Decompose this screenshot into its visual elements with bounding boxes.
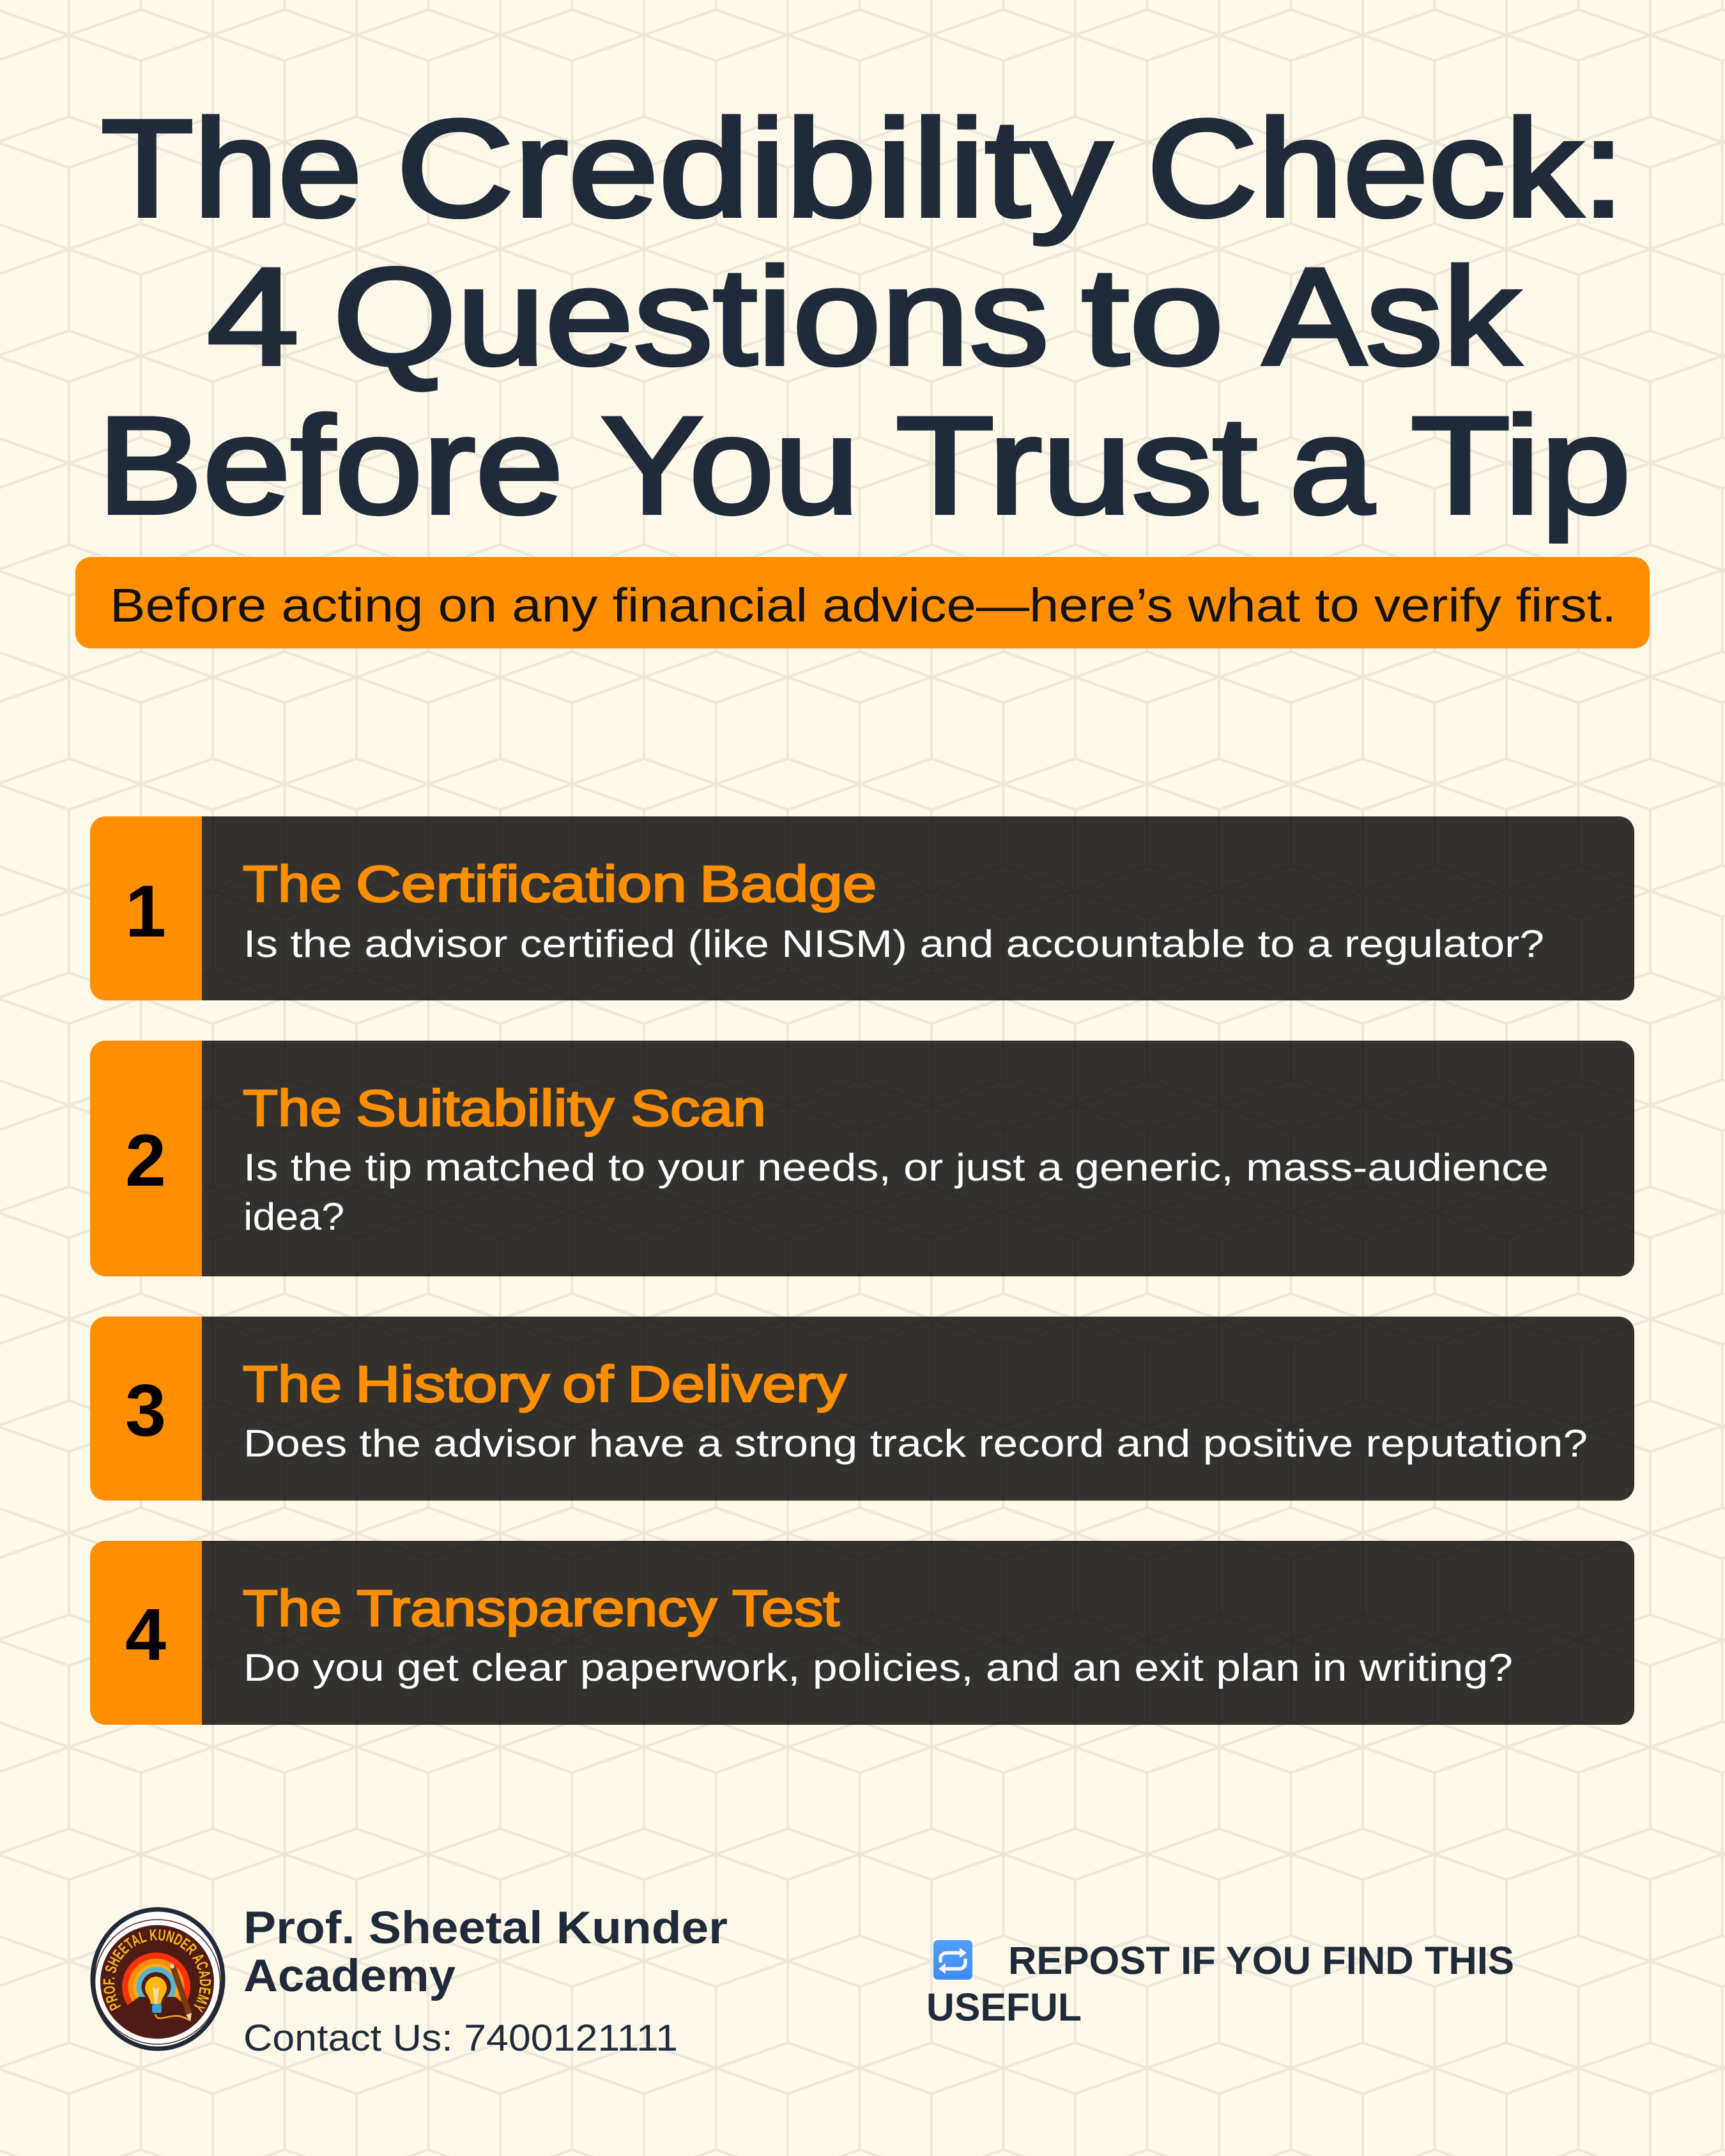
title: Questions	[333, 239, 1049, 394]
repost call to action: REPOST IF YOU FIND THIS	[1008, 1939, 1514, 1982]
title: Tip	[1411, 388, 1631, 542]
panel: question 4: The	[243, 1580, 342, 1637]
panel: question 3	[90, 1317, 1634, 1501]
repost call to action	[926, 1939, 1514, 2029]
panel: question 2: The	[243, 1080, 342, 1136]
icon: academy logo	[91, 1908, 225, 2051]
title: You	[601, 388, 859, 542]
panel: question 1: Certification	[356, 855, 687, 912]
panel: question 1: The	[243, 855, 342, 912]
title: Trust	[896, 388, 1257, 542]
title: Credibility	[396, 91, 1112, 245]
panel: question 1: 1	[125, 871, 166, 952]
panel: question 3: History	[355, 1356, 549, 1412]
panel: question 1	[90, 816, 1634, 1000]
panel: question 2: 2	[125, 1120, 166, 1202]
academy name and contact: Contact Us: 7400121111	[243, 2017, 678, 2059]
repost call to action: USEFUL	[926, 1985, 1082, 2029]
academy name and contact: Academy	[243, 1951, 456, 2001]
panel: question 3: Delivery	[627, 1356, 847, 1412]
title: The	[101, 91, 362, 245]
title: a	[1289, 388, 1375, 542]
panel: question 4: Test	[732, 1580, 839, 1637]
title	[97, 91, 1631, 542]
panel: question 3: of	[562, 1356, 614, 1412]
panel: question 1: Badge	[700, 855, 877, 912]
title: Before	[97, 388, 564, 542]
panel: question 2: idea?	[243, 1195, 344, 1238]
title: Check:	[1147, 91, 1625, 245]
panel: question 2	[90, 1041, 1634, 1276]
panel: question 3: 3	[125, 1370, 166, 1451]
panel: question 4: Do you get clear paperwork, policies, and an exit plan in writing?	[243, 1646, 1513, 1689]
panel: question 3: The	[243, 1356, 342, 1412]
title: to	[1082, 239, 1224, 394]
title: Ask	[1263, 239, 1521, 394]
panel: question 4	[90, 1541, 1634, 1725]
panel: question 4: 4	[125, 1594, 166, 1676]
panel: question 1: Is the advisor certified (like NISM) and accountable to a regulator?	[243, 922, 1544, 965]
panel: question 3: Does the advisor have a strong track record and positive reputation?	[243, 1422, 1588, 1465]
icon: academy logo: PROF. SHEETAL KUNDER ACADEMY	[103, 1929, 211, 2014]
subtitle banner: Before acting on any financial advice—here’s what to verify first.	[110, 579, 1616, 632]
academy name and contact	[243, 1903, 728, 2059]
subtitle banner	[75, 557, 1650, 648]
panel: question 2: Suitability	[356, 1080, 614, 1136]
title: 4	[207, 239, 299, 394]
panel: question 4: Transparency	[356, 1580, 717, 1637]
panel: question 2: Scan	[631, 1080, 766, 1136]
icon: repost	[933, 1940, 972, 1980]
academy name and contact: Prof. Sheetal Kunder	[243, 1903, 728, 1953]
panel: question 2: Is the tip matched to your needs, or just a generic, mass-audience	[243, 1146, 1549, 1189]
